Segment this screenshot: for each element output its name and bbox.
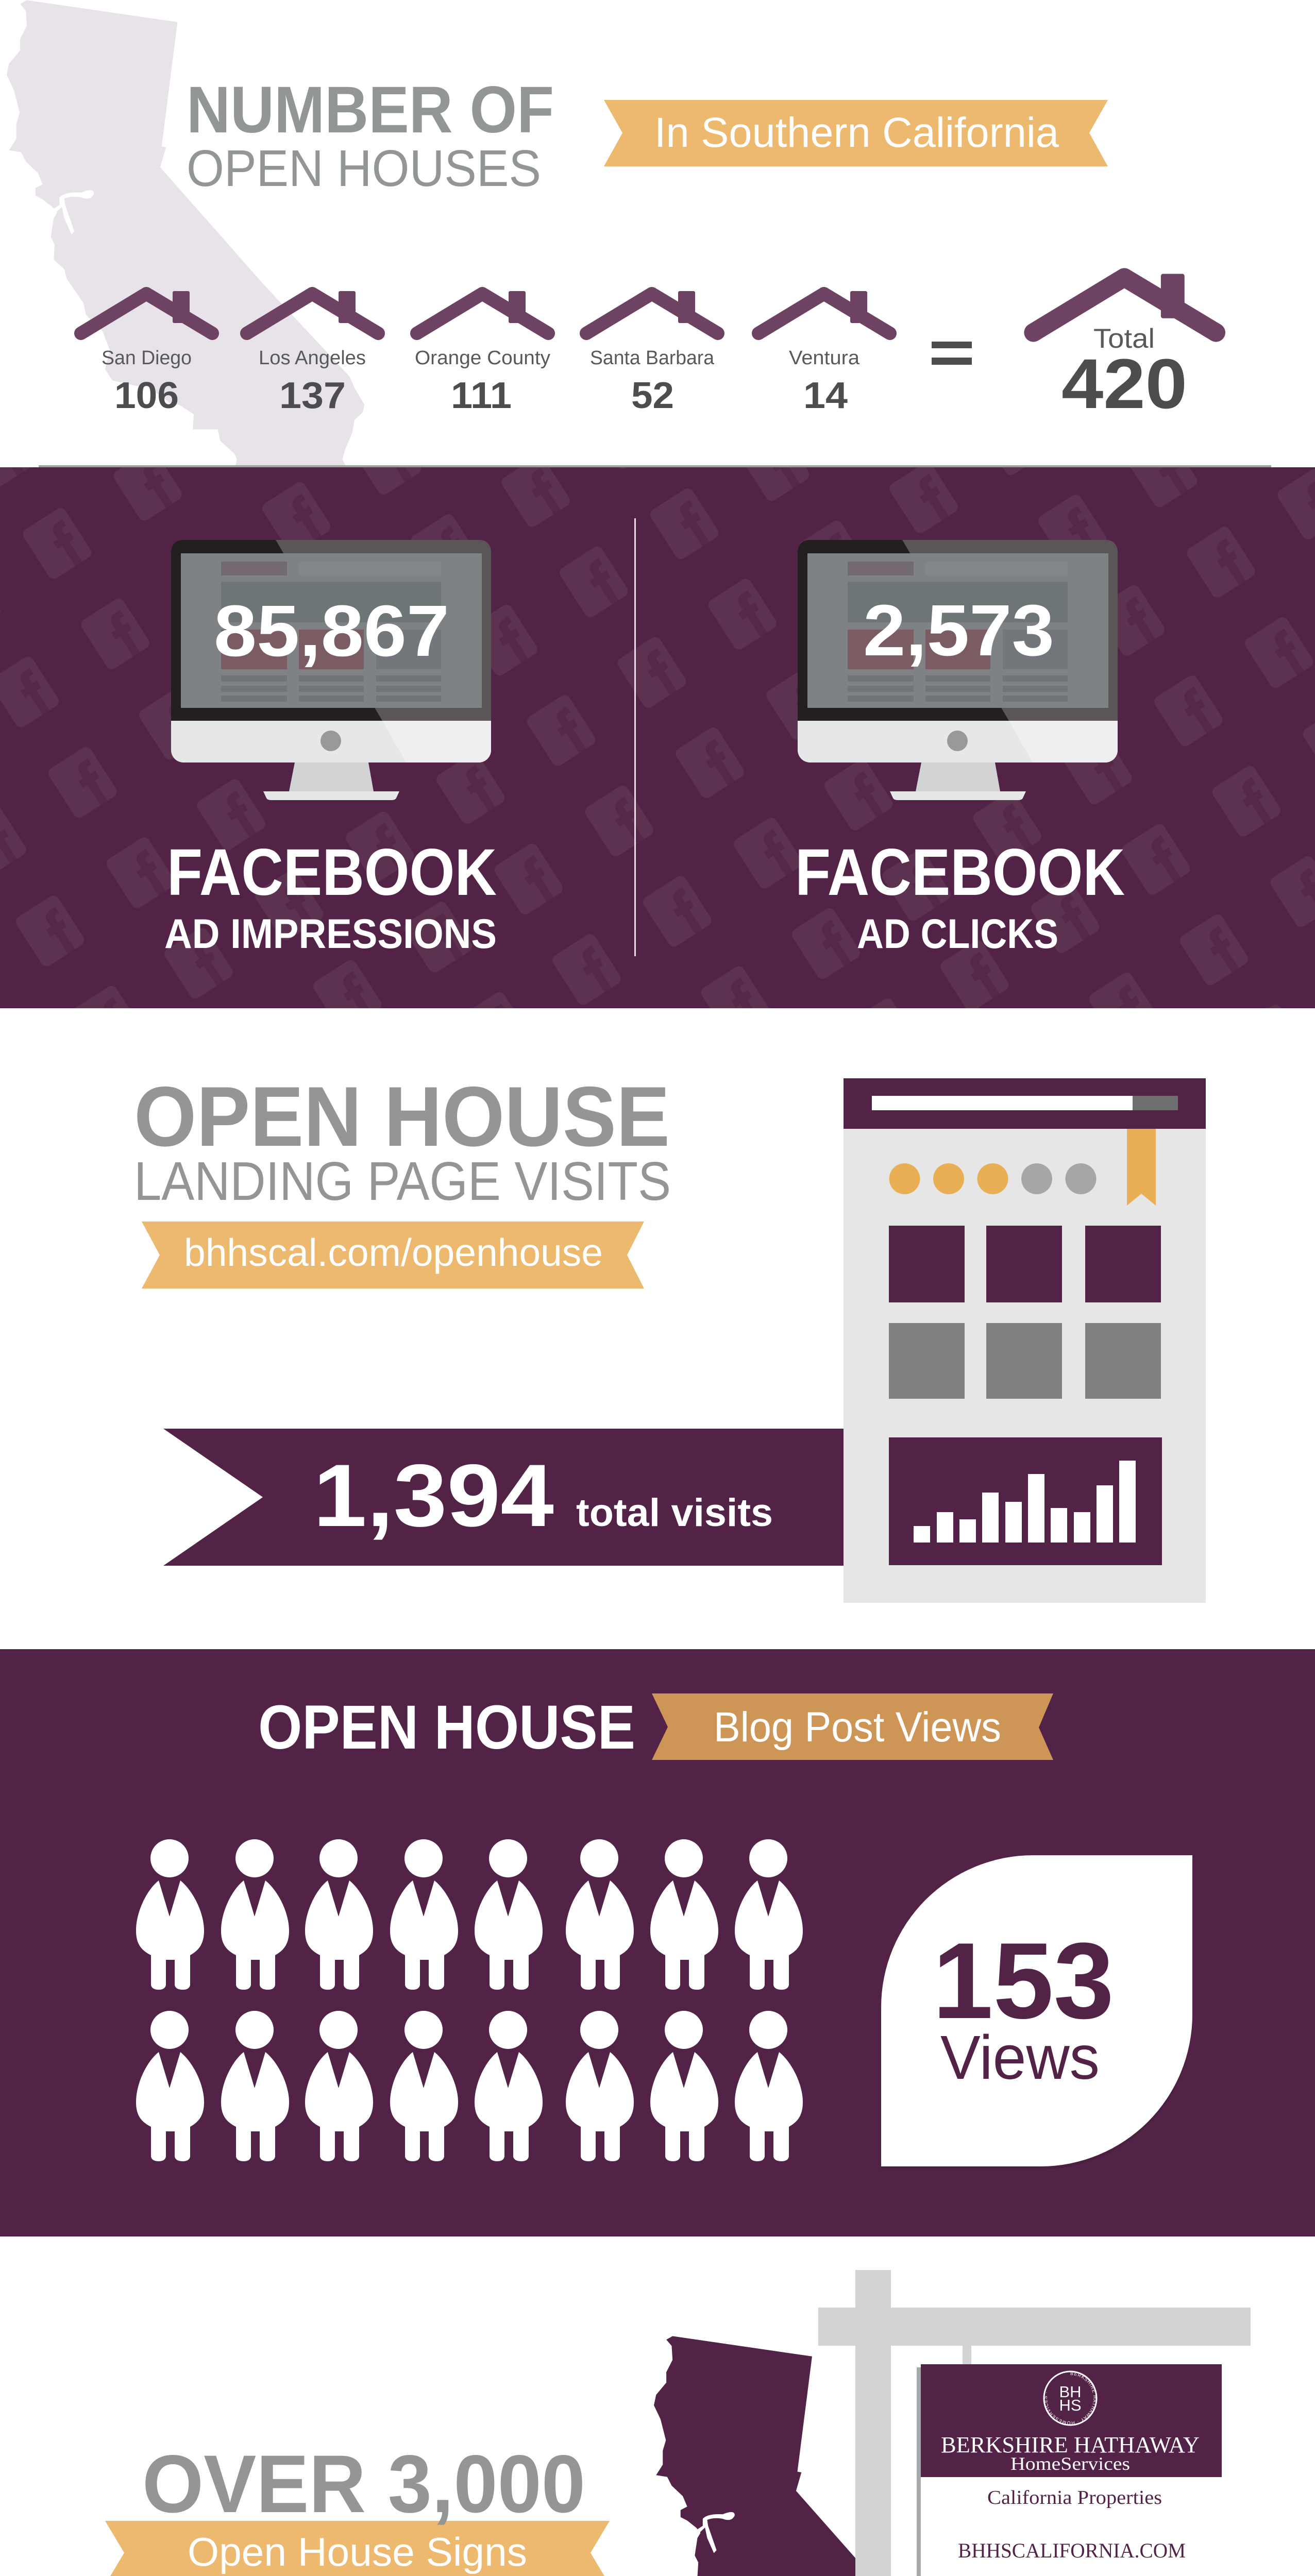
callout: 153 views: 153 (933, 1920, 1114, 2041)
logo seal: BERKSHIRE HATHAWAY · HOMESERVICES · (1045, 2372, 1095, 2425)
sign text: California Properties (987, 2487, 1162, 2509)
bar chart (889, 1437, 1162, 1565)
arrow banner: total visits (163, 1429, 845, 1566)
house: los angeles: Los Angeles (259, 347, 366, 369)
real estate sign (917, 2364, 1222, 2576)
sign text: BHHSCALIFORNIA.COM (958, 2539, 1186, 2562)
heading: facebook ad clicks: AD CLICKS (857, 911, 1058, 957)
california silhouette background (7, 0, 365, 488)
house: san diego: 106 (114, 375, 179, 416)
house: ventura (758, 291, 890, 416)
monitor: impressions: 85,867 (214, 590, 449, 671)
heading: facebook ad clicks (795, 836, 1125, 957)
callout: 153 views: Views (940, 2022, 1100, 2092)
heading: open house landing page visits (134, 1069, 671, 1212)
house: san diego: San Diego (102, 347, 192, 369)
ribbon: url: bhhscal.com/openhouse (184, 1231, 603, 1274)
heading: facebook ad impressions: FACEBOOK (167, 836, 497, 909)
sign text (941, 2432, 1200, 2562)
monitor: clicks: 2,573 (863, 589, 1054, 671)
logo seal: HS (1059, 2396, 1082, 2414)
house: total: Total (1093, 324, 1155, 354)
logo seal: BH (1059, 2383, 1082, 2401)
california map (654, 2336, 985, 2576)
callout: 153 views (881, 1855, 1192, 2170)
web page illustration (844, 1078, 1206, 1603)
sign post (818, 2270, 1251, 2576)
heading: open house landing page visits: OPEN HOUSE (134, 1069, 670, 1164)
monitor: impressions (171, 540, 491, 800)
house: orange county: 111 (451, 375, 512, 416)
arrow banner: total visits: total visits (576, 1491, 773, 1535)
ribbon: url (142, 1222, 644, 1289)
heading: facebook ad impressions (164, 836, 497, 957)
heading: number of open houses (187, 73, 554, 197)
house: ventura: 14 (803, 375, 848, 416)
panel: open house signs (105, 2270, 1251, 2576)
house: los angeles: 137 (279, 375, 346, 416)
panel: blog post views (0, 1649, 1315, 2236)
arrow banner: total visits: 1,394 (313, 1446, 554, 1545)
heading: open house: OPEN HOUSE (258, 1692, 635, 1762)
ribbon: in southern california: In Southern California (654, 109, 1059, 156)
house: orange county: Orange County (415, 347, 550, 369)
ribbon: blog post views (652, 1693, 1053, 1760)
heading: over 3,000: OVER 3,000 (142, 2438, 585, 2530)
house: los angeles (247, 291, 378, 416)
house: total (1033, 274, 1216, 423)
panel: number of open houses (7, 0, 1216, 488)
house: orange county (415, 291, 550, 416)
equals sign (932, 342, 972, 365)
house: santa barbara (586, 291, 718, 416)
heading: open house landing page visits: LANDING PAGE VISITS (134, 1151, 671, 1212)
ribbon: open house signs (105, 2521, 610, 2576)
ribbon: in southern california (604, 100, 1108, 166)
ribbon: open house signs: Open House Signs (188, 2529, 527, 2574)
house: total: 420 (1061, 345, 1187, 423)
house: santa barbara: Santa Barbara (590, 347, 715, 369)
panel: landing page visits (134, 1069, 1206, 1603)
house: ventura: Ventura (789, 347, 860, 369)
sign text: HomeServices (1010, 2453, 1130, 2474)
house: santa barbara: 52 (631, 375, 674, 416)
heading: facebook ad clicks: FACEBOOK (795, 836, 1125, 909)
monitor: clicks (798, 540, 1118, 800)
ribbon: blog post views: Blog Post Views (714, 1704, 1001, 1751)
panel: facebook ads (0, 465, 1315, 1008)
house: san diego (81, 291, 212, 416)
people icons (136, 1839, 803, 2161)
heading: number of open houses: OPEN HOUSES (187, 140, 541, 197)
heading: number of open houses: NUMBER OF (187, 73, 554, 147)
sign text: BERKSHIRE HATHAWAY (941, 2432, 1200, 2458)
heading: facebook ad impressions: AD IMPRESSIONS (164, 911, 497, 957)
